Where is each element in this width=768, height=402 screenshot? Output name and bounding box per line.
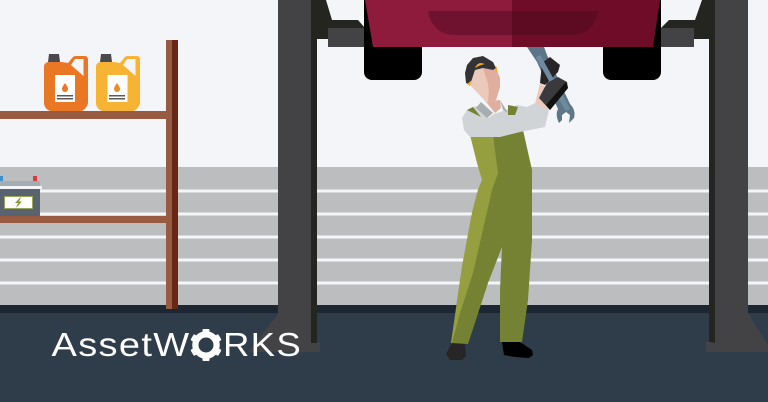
logo: AssetWORKS	[52, 327, 302, 364]
logo text left: AssetW	[52, 327, 190, 364]
face shade	[483, 68, 500, 103]
right tyre	[603, 0, 661, 80]
left shoe	[446, 343, 466, 360]
raised forearm skin	[535, 83, 550, 113]
underbody recess right	[512, 11, 598, 35]
shirt with sleeve	[462, 103, 549, 137]
wrench front shaft	[538, 56, 568, 110]
right shoe	[502, 342, 533, 358]
lower glove	[539, 77, 568, 110]
garage wall with white stripes	[0, 167, 768, 305]
icon: orange oil canister	[44, 54, 88, 111]
car body left half	[365, 0, 512, 47]
left tyre	[364, 0, 422, 80]
underbody recess left	[428, 11, 512, 35]
overalls dark side	[451, 130, 532, 344]
icon: yellow oil canister	[96, 54, 140, 111]
car body right half	[512, 0, 660, 47]
wrench shaft and heads	[527, 47, 574, 123]
overalls light side	[451, 135, 498, 343]
cap	[465, 56, 496, 85]
shirt collar	[476, 100, 508, 118]
icon: gear as O	[190, 329, 222, 361]
left car lift column	[248, 0, 366, 352]
logo text right: RKS	[223, 327, 302, 364]
icon: car battery	[0, 176, 42, 216]
overall straps	[467, 105, 518, 117]
mechanic	[446, 47, 574, 360]
garage floor	[0, 305, 768, 402]
right car lift column	[661, 0, 768, 352]
shelf unit	[0, 40, 178, 309]
lower glove cuff	[546, 82, 568, 110]
cap badge	[467, 63, 497, 86]
upper glove	[540, 57, 560, 85]
neck	[486, 100, 501, 113]
car on lift	[364, 0, 661, 80]
face light	[470, 68, 500, 103]
